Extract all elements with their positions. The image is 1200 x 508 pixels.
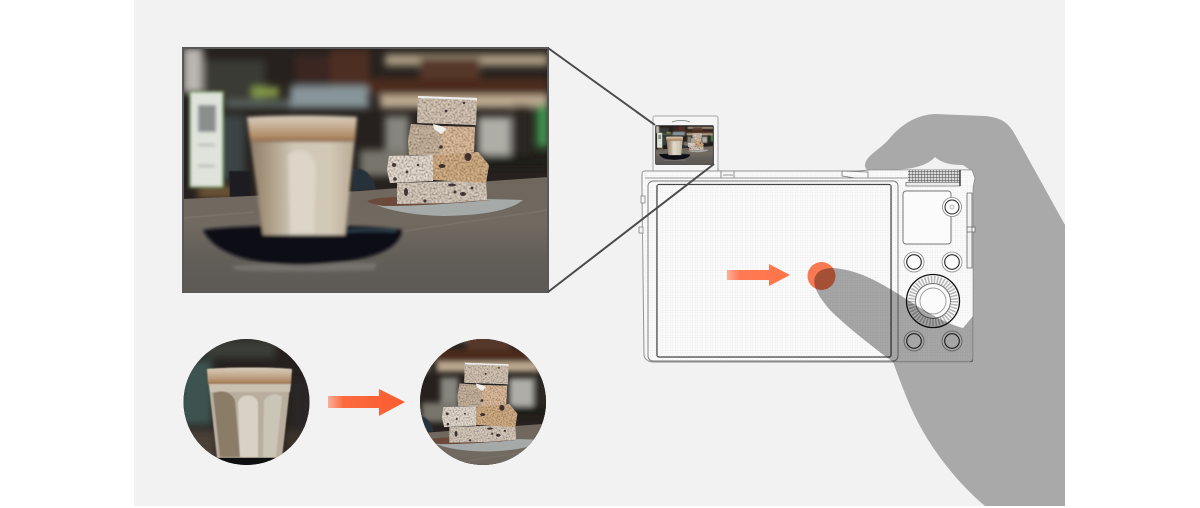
- touch screen: [657, 184, 891, 357]
- thumb pad panel: [903, 191, 951, 244]
- touch point: [808, 262, 836, 290]
- hand holding the camera: [865, 114, 1065, 506]
- circle: brownies in focus: [420, 339, 546, 465]
- record button: [942, 198, 962, 216]
- control dial: [906, 170, 960, 186]
- screen bezel: [648, 181, 898, 361]
- camera body: [642, 170, 975, 362]
- drinking glass: [207, 368, 292, 458]
- callout lines from viewfinder to photo: [548, 48, 714, 292]
- thumb overlay: [814, 268, 973, 362]
- tilting viewfinder screen housing: [652, 116, 718, 170]
- control wheel: [906, 274, 960, 328]
- arrow between subjects: [328, 389, 405, 416]
- side controls: [967, 193, 975, 268]
- background panel: [134, 0, 1065, 506]
- circle: glass in focus: [180, 339, 315, 466]
- arrow on touch screen: [727, 264, 790, 286]
- function buttons: [904, 252, 962, 351]
- main photo: full scene with focus on the drink stack: [183, 48, 548, 292]
- camera back line drawing: [639, 116, 975, 362]
